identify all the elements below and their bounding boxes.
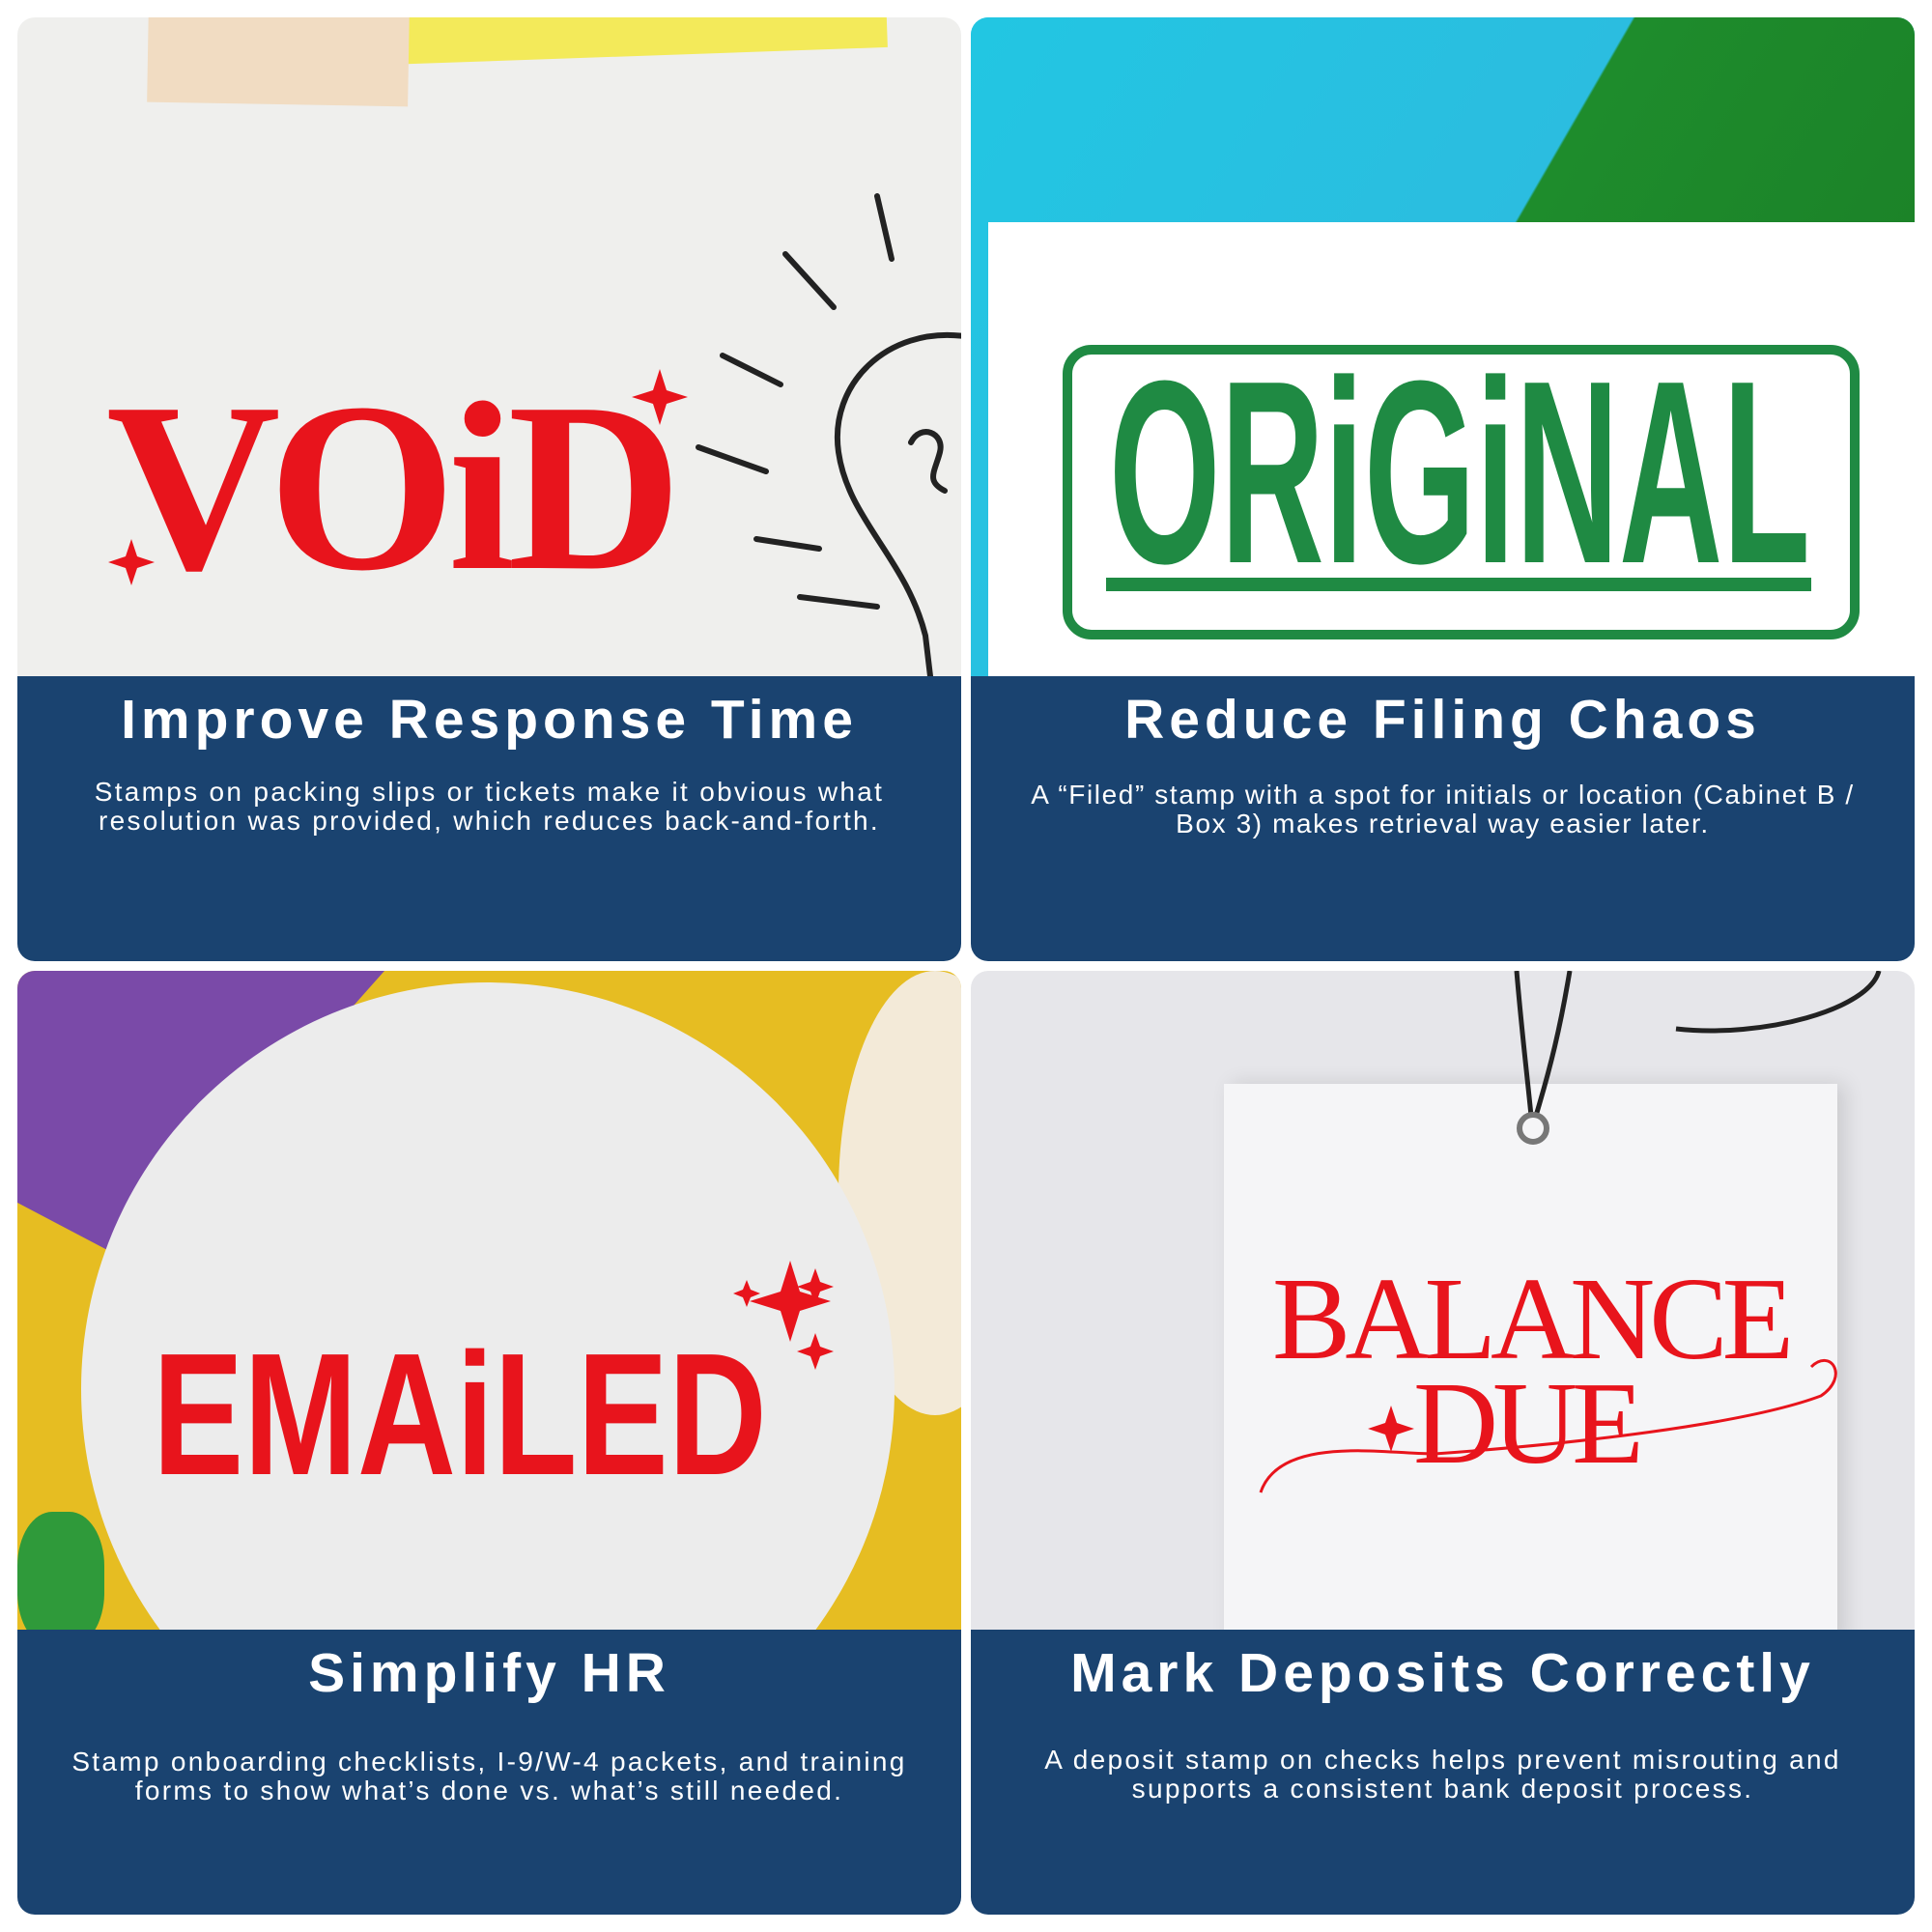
image: emailed stamp: EMAiLED — [153, 1318, 767, 1512]
caption band: Simplify HR — [308, 1642, 670, 1704]
image: balance due tag — [971, 971, 1915, 1630]
caption band: A “Filed” stamp with a spot for initials or location (Cabinet B / — [1031, 780, 1855, 810]
caption band: Mark Deposits Correctly — [1070, 1642, 1815, 1704]
caption band: Improve Response Time — [121, 689, 858, 751]
caption band: Box 3) makes retrieval way easier later. — [1176, 809, 1710, 838]
caption band: supports a consistent bank deposit process. — [1132, 1774, 1753, 1804]
panel: reduce filing chaos — [971, 17, 1915, 961]
panel: mark deposits correctly — [971, 971, 1915, 1915]
image: void stamp: VOiD — [106, 354, 674, 621]
caption band: Reduce Filing Chaos — [1124, 689, 1761, 751]
caption band: forms to show what’s done vs. what’s still needed. — [135, 1776, 843, 1805]
caption band: Stamps on packing slips or tickets make it obvious what — [95, 777, 884, 807]
image: balance due tag: DUE — [1413, 1358, 1638, 1489]
panel: improve response time — [17, 17, 961, 961]
image: original stamp — [971, 17, 1915, 676]
caption band: A deposit stamp on checks helps prevent misrouting and — [1044, 1745, 1841, 1775]
caption band: resolution was provided, which reduces back-and-forth. — [99, 806, 880, 836]
caption band — [17, 676, 961, 961]
image: original stamp: ORiGiNAL — [1109, 327, 1810, 618]
caption band — [17, 1630, 961, 1915]
caption band: Stamp onboarding checklists, I-9/W-4 packets, and training — [71, 1747, 907, 1776]
image: emailed stamp — [17, 971, 961, 1630]
caption band — [971, 1630, 1915, 1915]
image: void stamp — [17, 17, 961, 676]
panel: simplify hr — [17, 971, 961, 1915]
caption band — [971, 676, 1915, 961]
image: balance due tag: BALANCE — [1272, 1254, 1788, 1384]
